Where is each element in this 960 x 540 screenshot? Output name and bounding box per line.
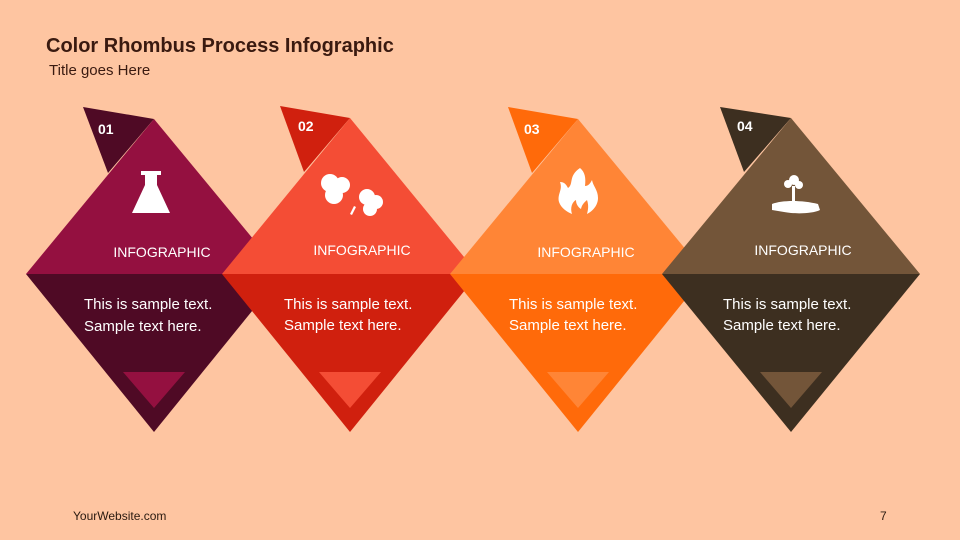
page number: 7 <box>880 509 887 523</box>
rhombus 03 <box>450 119 706 432</box>
icon: flame <box>559 168 598 214</box>
panel: step 02 <box>222 106 478 432</box>
title: Color Rhombus Process Infographic <box>46 35 394 57</box>
label 03: INFOGRAPHIC <box>537 244 635 260</box>
tab 04: 04 <box>737 118 753 134</box>
tab 02: 02 <box>298 118 314 134</box>
panel: step 01 <box>26 107 282 432</box>
label 01: INFOGRAPHIC <box>113 244 211 260</box>
rhombus 01 <box>26 119 282 432</box>
tab 03 <box>508 107 578 173</box>
footer website: YourWebsite.com <box>73 509 166 523</box>
icon: hand with plant <box>772 175 820 213</box>
text 03: This is sample text. <box>509 296 637 313</box>
tab 02 <box>280 106 350 172</box>
tab 01 <box>83 107 154 173</box>
subtitle: Title goes Here <box>49 62 150 79</box>
tab 01: 01 <box>98 121 114 137</box>
text 03: Sample text here. <box>509 317 627 334</box>
text 02: Sample text here. <box>284 317 402 334</box>
panel: step 03 <box>450 107 706 432</box>
panel: step 04 <box>662 107 920 432</box>
text 04: This is sample text. <box>723 296 851 313</box>
icon: flask <box>132 171 170 213</box>
rhombus 04 <box>662 118 920 432</box>
label 02: INFOGRAPHIC <box>313 242 411 258</box>
rhombus 02 <box>222 118 478 432</box>
text 02: This is sample text. <box>284 296 412 313</box>
text 04: Sample text here. <box>723 317 841 334</box>
icon: leaves <box>321 174 383 216</box>
tab 03: 03 <box>524 121 540 137</box>
text 01: Sample text here. <box>84 318 202 335</box>
text 01: This is sample text. <box>84 296 212 313</box>
tab 04 <box>720 107 791 172</box>
label 04: INFOGRAPHIC <box>754 242 852 258</box>
